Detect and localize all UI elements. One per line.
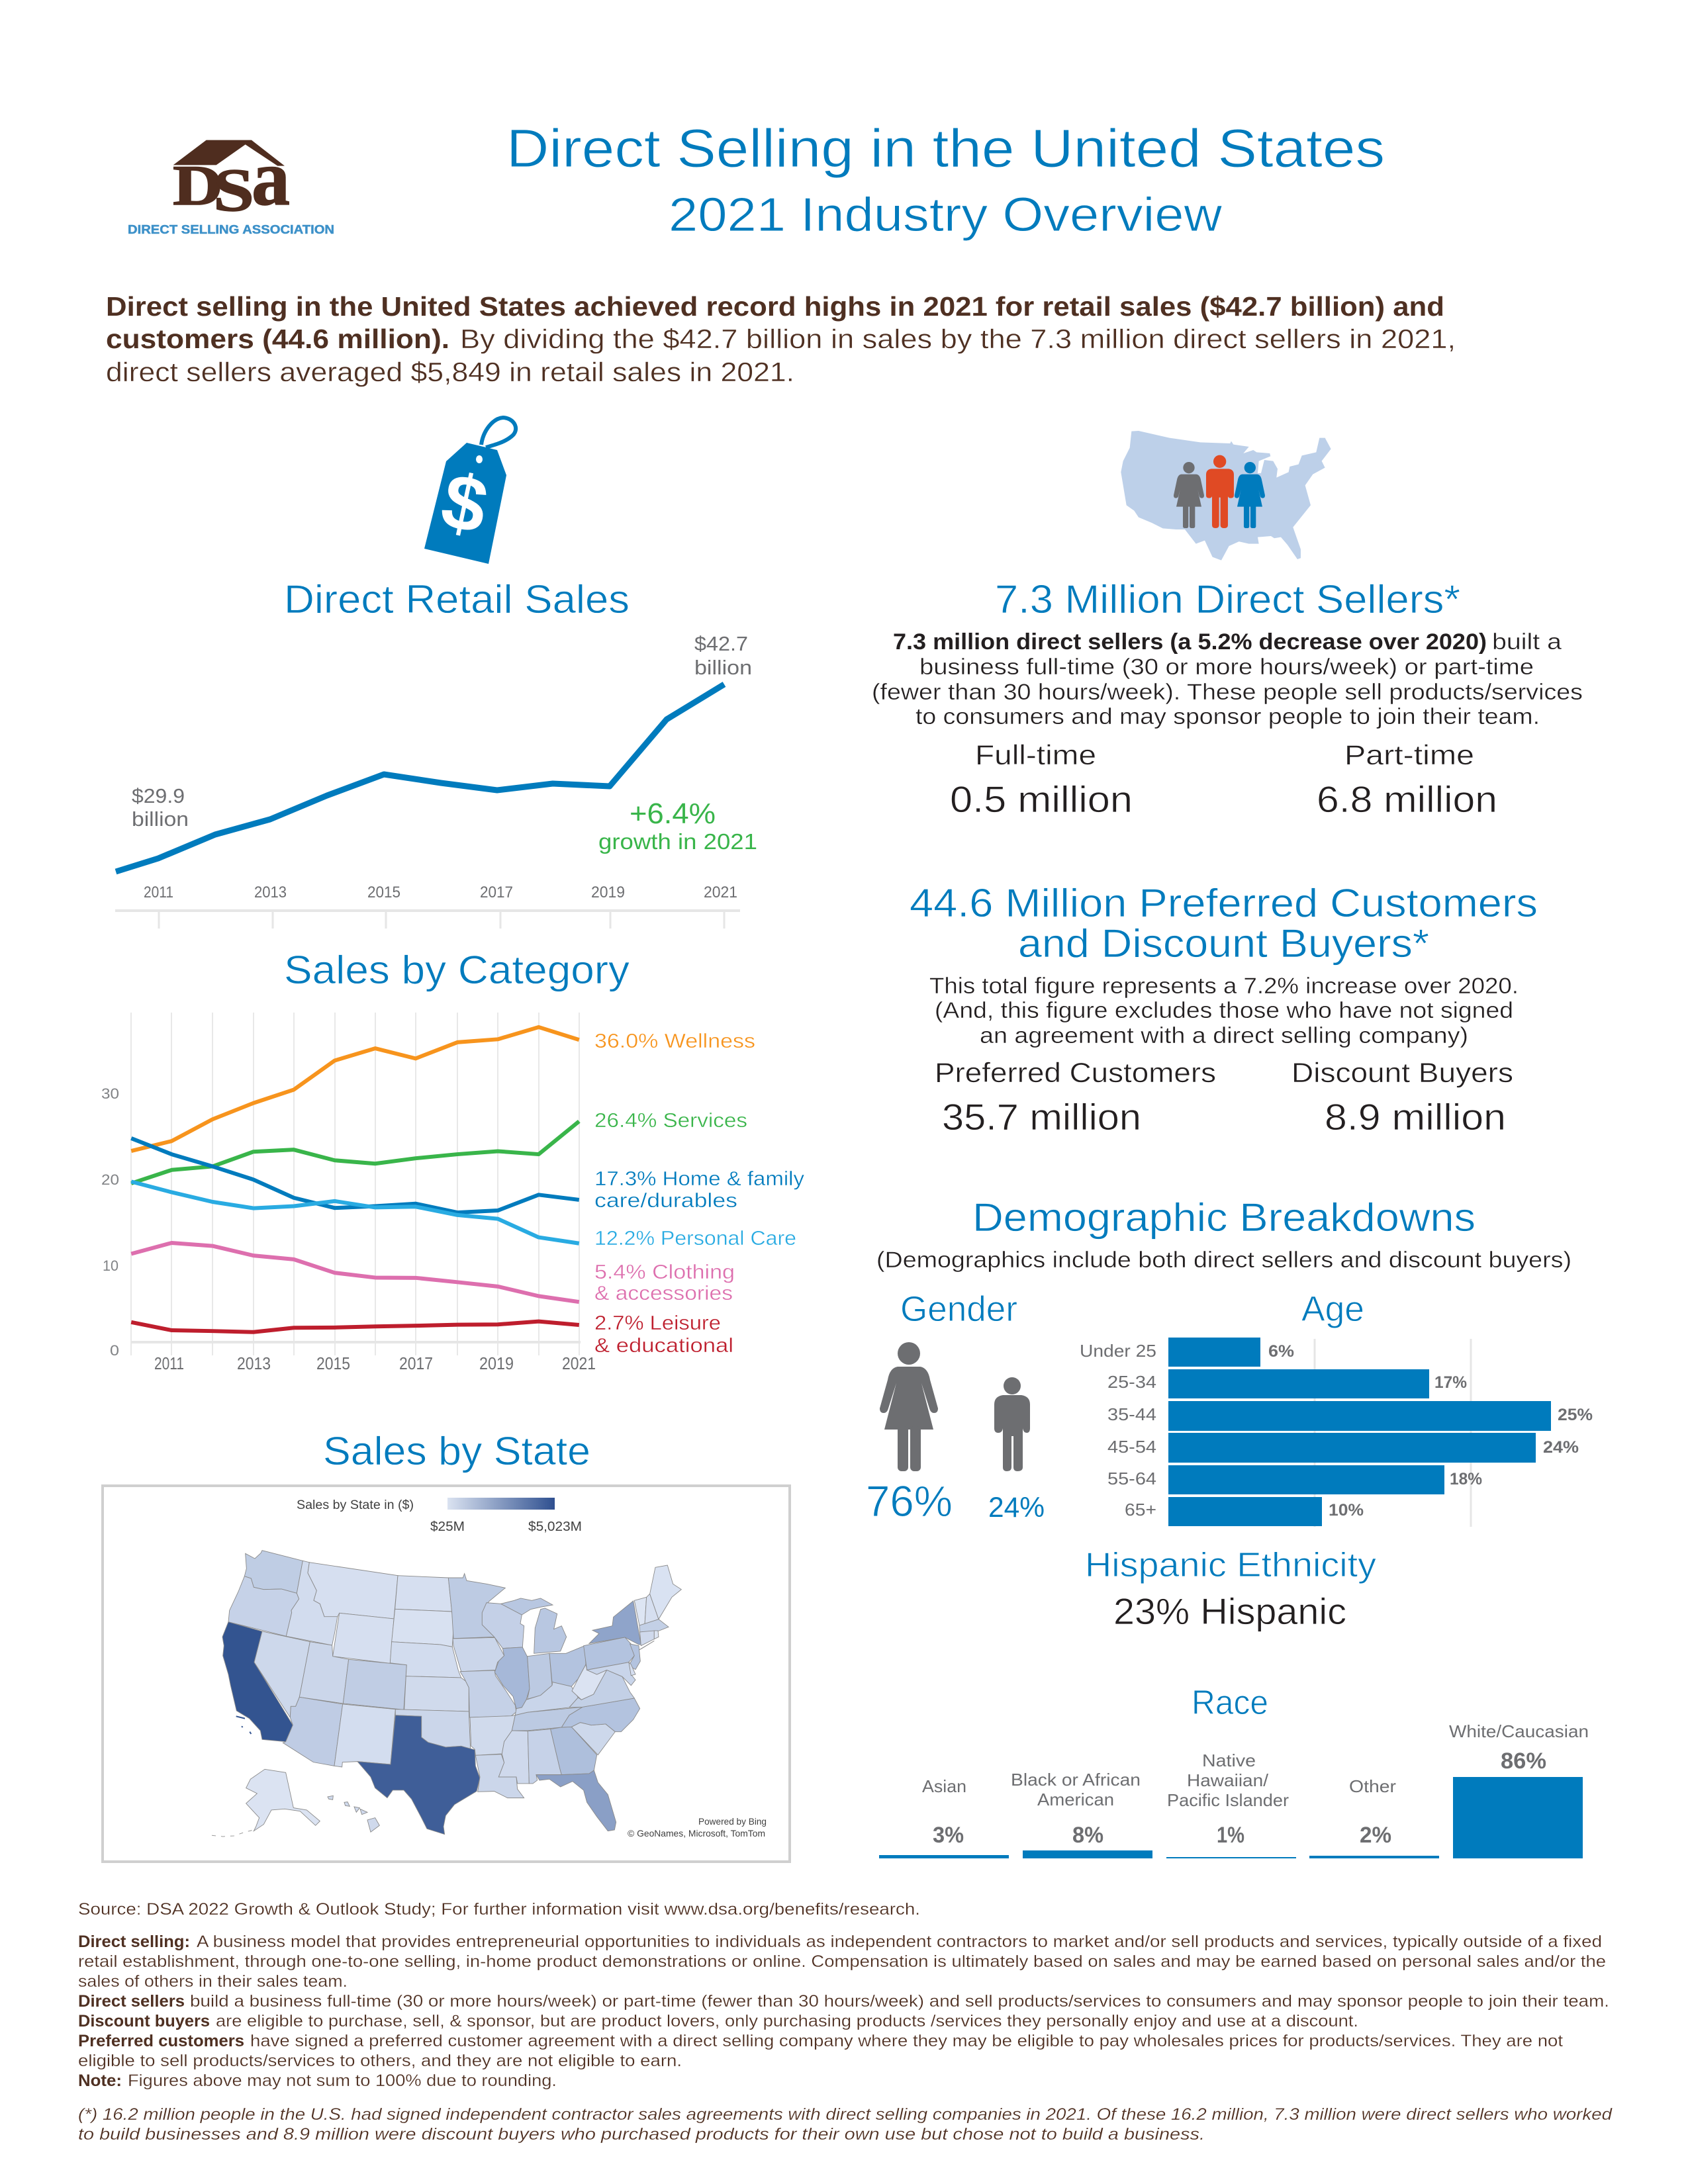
bar chart: age: Under 25 (1080, 1341, 1156, 1361)
heading: direct sellers: 7.3 Million Direct Sellers* (995, 577, 1460, 621)
bar chart: race: Native (1202, 1751, 1256, 1770)
label: leisure: 2.7% Leisure (594, 1311, 721, 1334)
stat: part-time (1317, 739, 1497, 820)
icon: price tag (424, 418, 516, 564)
label: home and family: care/durables (594, 1189, 737, 1212)
bar chart: race: Asian (922, 1776, 966, 1796)
definitions text block: are eligible to purchase, sell, & sponsor, but are product lovers, only purchasing products /services they personally enjoy and use at a discount. (216, 2012, 1358, 2030)
subtitle: 2021 Industry Overview (669, 189, 1223, 242)
heading: race: Race (1192, 1684, 1268, 1722)
map attribution (628, 1816, 767, 1839)
heading: demographics: Demographic Breakdowns (972, 1195, 1476, 1240)
heading: direct retail sales: Direct Retail Sales (284, 577, 630, 621)
bar chart: age: 55-64 (1107, 1469, 1156, 1488)
heading: sales by category: Sales by Category (284, 948, 630, 992)
panel: demographic breakdowns (866, 1195, 1593, 1858)
callout: 2010 value: $29.9 (132, 784, 185, 807)
bar chart: race: White/Caucasian (1449, 1721, 1589, 1741)
stat: women 76%: 76% (866, 1477, 953, 1525)
line chart: retail sales (116, 684, 724, 872)
callout: 2010 value (132, 784, 189, 831)
x axis: years: 2021 (562, 1353, 596, 1373)
stat: preferred customers (935, 1057, 1216, 1138)
footnote: to build businesses and 8.9 million were discount buyers who purchased products for their own use but chose not to build a business. (78, 2125, 1205, 2144)
map legend: Sales by State in ($) (297, 1498, 414, 1512)
definitions text block: Discount buyers (78, 2012, 210, 2030)
definitions text block: build a business full-time (30 or more hours/week) or part-time (fewer than 30 hours/week) and sell products/services to consumers and may sponsor people to join their team. (190, 1992, 1609, 2011)
heading: customers (910, 881, 1538, 966)
intro text block: direct sellers averaged $5,849 in retail sales in 2021. (106, 357, 794, 387)
bar chart: race: Black or African (1011, 1770, 1141, 1790)
heading: hispanic ethnicity: Hispanic Ethnicity (1085, 1546, 1376, 1584)
definitions text block: Note: (78, 2071, 122, 2090)
definitions text block: sales of others in their sales team. (78, 1972, 348, 1991)
stat: part-time: Part-time (1344, 739, 1474, 770)
logo: Direct Selling Association: S (213, 156, 254, 224)
stat: full-time (950, 739, 1133, 820)
text block: customers description (929, 974, 1519, 1048)
heading: age: Age (1301, 1289, 1364, 1329)
panel: preferred customers and discount buyers (910, 881, 1538, 1138)
footnote: (*) 16.2 million people in the U.S. had signed independent contractor sales agreements with direct selling companies in 2021. Of these 16.2 million, 7.3 million were direct sellers who worked (78, 2105, 1613, 2124)
panel: sales by state (103, 1429, 790, 1862)
y axis labels: 20 (101, 1171, 119, 1188)
bar chart: race: 3% (933, 1823, 964, 1848)
logo: Direct Selling Association (128, 134, 334, 236)
bar chart: race: 1% (1217, 1823, 1244, 1848)
text block: direct sellers description: to consumers and may sponsor people to join their team. (915, 704, 1540, 729)
heading: sales by state: Sales by State (323, 1429, 590, 1473)
logo: Direct Selling Association: a (252, 134, 290, 222)
panel: direct retail sales (115, 577, 757, 929)
bar chart: age: 18% (1450, 1470, 1482, 1488)
bar chart: age: 25% (1558, 1406, 1593, 1424)
x axis: years: 2017 (480, 884, 513, 901)
y axis labels: 30 (101, 1085, 119, 1102)
stat: full-time: Full-time (975, 739, 1096, 770)
icon: man (994, 1377, 1030, 1471)
definitions text block: have signed a preferred customer agreement with a direct selling company where they may be eligible to pay wholesales prices for products/services. They are not (250, 2032, 1563, 2050)
text block: customers description: (And, this figure excludes those who have not signed (935, 998, 1513, 1023)
label: wellness: 36.0% Wellness (594, 1029, 755, 1052)
y axis labels (101, 1085, 119, 1359)
x axis: years: 2013 (254, 884, 287, 901)
x axis: years: 2011 (144, 884, 173, 901)
label: services: 26.4% Services (594, 1109, 747, 1132)
bar chart: race: American (1037, 1790, 1114, 1809)
footnote (78, 2105, 1613, 2144)
callout: 2021 value (694, 632, 752, 679)
callout: 2010 value: billion (132, 807, 189, 831)
intro text block: Direct selling in the United States achieved record highs in 2021 for retail sales ($42.7 billion) and (106, 291, 1444, 322)
definitions text block: eligible to sell products/services to others, and they are not eligible to earn. (78, 2052, 682, 2070)
bar chart: age (1080, 1338, 1593, 1527)
stat: preferred customers: Preferred Customers (935, 1057, 1216, 1088)
definitions text block (78, 1933, 1609, 2090)
heading: gender: Gender (900, 1289, 1017, 1329)
stat: full-time: 0.5 million (950, 778, 1133, 820)
callout: 2021 value: billion (694, 656, 752, 679)
x axis: years: 2019 (479, 1353, 514, 1373)
panel: sales by category (101, 948, 805, 1373)
map legend: $25M (430, 1520, 465, 1534)
y axis labels: 10 (103, 1257, 118, 1274)
intro text block (106, 291, 1456, 387)
panel: direct sellers (872, 577, 1583, 820)
text block: customers description: an agreement with a direct selling company) (980, 1023, 1468, 1048)
demographics note: (Demographics include both direct sellers and discount buyers) (876, 1248, 1571, 1273)
label: leisure: & educational (594, 1334, 733, 1357)
bar chart: age: 6% (1268, 1342, 1294, 1361)
bar chart: race: Hawaiian/ (1187, 1770, 1269, 1790)
intro text block: By dividing the $42.7 billion in sales by the 7.3 million direct sellers in 2021, (460, 324, 1456, 354)
callout: growth in 2021: +6.4% (630, 797, 716, 830)
icon: US map with people (1121, 431, 1331, 561)
x axis: years: 2019 (591, 884, 625, 901)
text block: direct sellers description: (fewer than 30 hours/week). These people sell products/services (872, 680, 1583, 705)
line chart: categories (131, 1027, 579, 1332)
icon: woman (880, 1342, 938, 1471)
bar chart: race: Pacific Islander (1167, 1790, 1289, 1810)
heading: customers: and Discount Buyers* (1018, 921, 1429, 966)
definitions text block: A business model that provides entrepreneurial opportunities to individuals as independent contractors to market and/or sell products and services, typically outside of a fixed (197, 1933, 1602, 1951)
definitions text block: Figures above may not sum to 100% due to rounding. (128, 2071, 557, 2090)
definitions text block: Direct selling: (78, 1933, 190, 1951)
x axis: years: 2013 (237, 1353, 271, 1373)
x axis: years: 2011 (154, 1353, 184, 1373)
x axis: years: 2015 (316, 1353, 350, 1373)
text block: direct sellers description: business full-time (30 or more hours/week) or part-time (919, 655, 1534, 680)
logo: Direct Selling Association: D (173, 154, 223, 217)
text block: customers description: This total figure represents a 7.2% increase over 2020. (929, 974, 1519, 999)
label: personal care: 12.2% Personal Care (594, 1226, 796, 1250)
definitions text block: Preferred customers (78, 2032, 244, 2050)
stat: hispanic: 23% Hispanic (1113, 1590, 1346, 1632)
label: clothing: & accessories (594, 1281, 733, 1304)
text block: direct sellers description: 7.3 million direct sellers (a 5.2% decrease over 2020) (893, 629, 1487, 655)
text block: direct sellers description: built a (1492, 629, 1562, 655)
x axis: years: 2015 (367, 884, 400, 901)
bar chart: age: 25-34 (1107, 1372, 1156, 1392)
label: clothing: 5.4% Clothing (594, 1260, 735, 1283)
bar chart: race: 8% (1072, 1823, 1103, 1848)
x axis: years: 2021 (704, 884, 737, 901)
bar chart: race: 2% (1360, 1823, 1391, 1848)
callout: growth in 2021: growth in 2021 (598, 829, 757, 854)
stat: discount buyers (1291, 1057, 1513, 1138)
icon: price tag: $ (434, 457, 495, 551)
map legend: $5,023M (528, 1520, 582, 1534)
bar chart: age: 24% (1543, 1438, 1579, 1457)
x axis: years: 2017 (399, 1353, 433, 1373)
bar chart: age: 35-44 (1107, 1404, 1156, 1424)
stat: part-time: 6.8 million (1317, 778, 1497, 820)
x axis: years (115, 884, 740, 929)
bar chart: age: 17% (1434, 1373, 1467, 1392)
label: home and family: 17.3% Home & family (594, 1167, 805, 1190)
heading: customers: 44.6 Million Preferred Customers (910, 881, 1538, 925)
map attribution: Powered by Bing (698, 1816, 767, 1827)
bar chart: race: Other (1349, 1776, 1396, 1796)
stat: men 24%: 24% (988, 1492, 1045, 1524)
bar chart: race: 86% (1501, 1749, 1546, 1774)
bar chart: age: 10% (1329, 1501, 1364, 1520)
label: leisure (594, 1311, 733, 1357)
bar chart: race (879, 1721, 1589, 1858)
definitions text block: retail establishment, through one-to-one selling, in-home product demonstrations or online. Compensation is ultimately based on sales and may be earned based on personal sales and/or the (78, 1952, 1606, 1971)
label: home and family (594, 1167, 805, 1212)
bar chart: age: 65+ (1125, 1500, 1156, 1520)
source line: Source: DSA 2022 Growth & Outlook Study; For further information visit www.dsa.org/benefits/research. (78, 1900, 920, 1919)
map attribution: © GeoNames, Microsoft, TomTom (628, 1828, 765, 1839)
intro text block: customers (44.6 million). (106, 324, 449, 354)
bar chart: age: 45-54 (1107, 1437, 1156, 1457)
choropleth map of US states (212, 1551, 681, 1837)
definitions text block: Direct sellers (78, 1992, 185, 2011)
map legend (297, 1498, 582, 1534)
stat: preferred customers: 35.7 million (942, 1096, 1141, 1138)
x axis: years (154, 1353, 596, 1373)
stat: discount buyers: Discount Buyers (1291, 1057, 1513, 1088)
map frame (103, 1486, 790, 1862)
title: Direct Selling in the United States (506, 118, 1385, 179)
callout: 2021 value: $42.7 (694, 632, 748, 655)
y axis labels: 0 (110, 1342, 119, 1359)
label: clothing (594, 1260, 735, 1304)
logo: Direct Selling Association: DIRECT SELLING ASSOCIATION (128, 222, 334, 236)
text block: direct sellers description (872, 629, 1583, 729)
stat: discount buyers: 8.9 million (1325, 1096, 1506, 1138)
callout: growth in 2021 (598, 797, 757, 854)
